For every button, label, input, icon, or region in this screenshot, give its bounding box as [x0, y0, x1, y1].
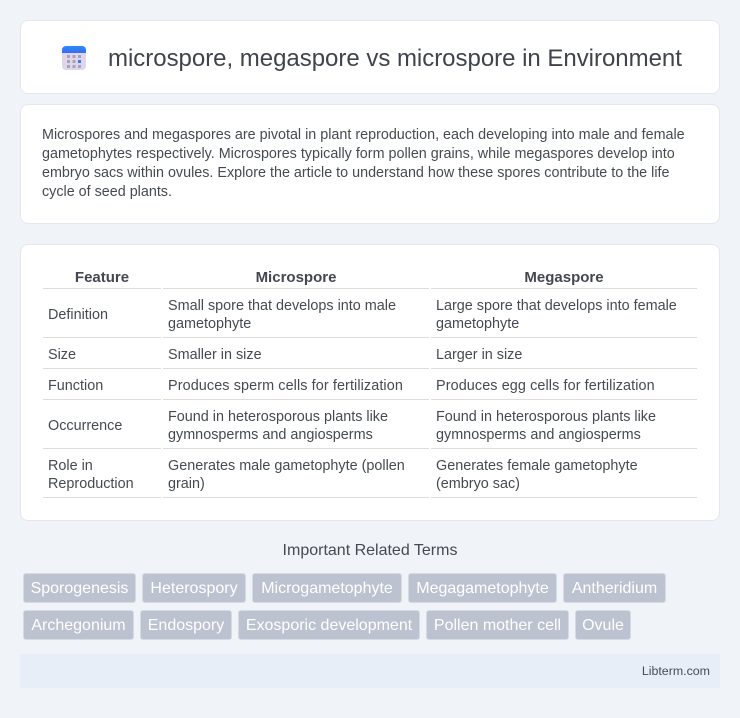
tag: Antheridium — [563, 573, 666, 603]
related terms tags — [23, 573, 666, 640]
tag: Endospory: Endospory — [148, 617, 224, 634]
tag: Antheridium: Antheridium — [572, 580, 657, 597]
comparison table panel: Produces egg cells for fertilization — [436, 378, 655, 394]
row: occurrence: Occurrence — [48, 418, 122, 434]
row: definition: Definition — [48, 307, 108, 323]
footer bar — [20, 654, 720, 688]
tag: Endospory — [140, 610, 232, 640]
intro text: cycle of seed plants. — [42, 184, 172, 200]
tag: Pollen mother cell: Pollen mother cell — [434, 617, 561, 634]
table header: megaspore: Megaspore — [524, 269, 604, 286]
icon: calendar — [62, 46, 86, 70]
comparison table panel: gametophyte — [436, 316, 519, 332]
tag: Heterospory: Heterospory — [150, 580, 238, 597]
footer credit: Libterm.com — [642, 664, 710, 678]
comparison table panel: Found in heterosporous plants like — [436, 409, 656, 425]
comparison table panel: gametophyte — [168, 316, 251, 332]
comparison table panel: Smaller in size — [168, 347, 262, 363]
tag: Megagametophyte — [408, 573, 557, 603]
intro text: Microspores and megaspores are pivotal in plant reproduction, each developing into male and female — [42, 127, 685, 143]
comparison table panel: gymnosperms and angiosperms — [436, 427, 641, 443]
tag: Pollen mother cell — [426, 610, 569, 640]
tag: Exosporic development — [238, 610, 420, 640]
intro text: gametophytes respectively. Microspores typically form pollen grains, while megaspores develop into — [42, 146, 675, 162]
intro panel — [20, 104, 720, 224]
table header: feature: Feature — [75, 269, 129, 286]
comparison table panel: Larger in size — [436, 347, 522, 363]
tag: Archegonium: Archegonium — [31, 617, 126, 634]
tag: Microgametophyte: Microgametophyte — [261, 580, 393, 597]
tag: Ovule: Ovule — [582, 617, 624, 634]
comparison table panel: Generates female gametophyte — [436, 458, 638, 474]
intro text: embryo sacs within ovules. Explore the article to understand how these spores contribute to the life — [42, 165, 669, 181]
tag: Sporogenesis — [23, 573, 136, 603]
tag: Microgametophyte — [252, 573, 402, 603]
tag: Ovule — [575, 610, 631, 640]
comparison table panel: (embryo sac) — [436, 476, 520, 492]
comparison table panel: Generates male gametophyte (pollen — [168, 458, 405, 474]
comparison table panel: Large spore that develops into female — [436, 298, 677, 314]
comparison table panel: grain) — [168, 476, 205, 492]
tag: Archegonium — [23, 610, 134, 640]
tag: Exosporic development: Exosporic development — [246, 617, 412, 634]
header panel — [20, 20, 720, 94]
tag: Megagametophyte: Megagametophyte — [416, 580, 549, 597]
row: function: Function — [48, 378, 103, 394]
tag: Heterospory — [142, 573, 246, 603]
comparison table panel: Produces sperm cells for fertilization — [168, 378, 403, 394]
comparison table panel: Small spore that develops into male — [168, 298, 396, 314]
row: role in reproduction: Role in — [48, 458, 93, 474]
row: size: Size — [48, 347, 76, 363]
tag: Sporogenesis: Sporogenesis — [31, 580, 128, 597]
title: microspore, megaspore vs microspore in Environment — [108, 45, 682, 72]
comparison table panel — [20, 244, 720, 521]
comparison table panel: gymnosperms and angiosperms — [168, 427, 373, 443]
row: role in reproduction — [48, 458, 134, 492]
comparison table panel: Found in heterosporous plants like — [168, 409, 388, 425]
table header: microspore: Microspore — [256, 269, 336, 286]
intro text — [42, 127, 685, 200]
row: role in reproduction: Reproduction — [48, 476, 134, 492]
related terms heading: Important Related Terms — [283, 542, 457, 559]
